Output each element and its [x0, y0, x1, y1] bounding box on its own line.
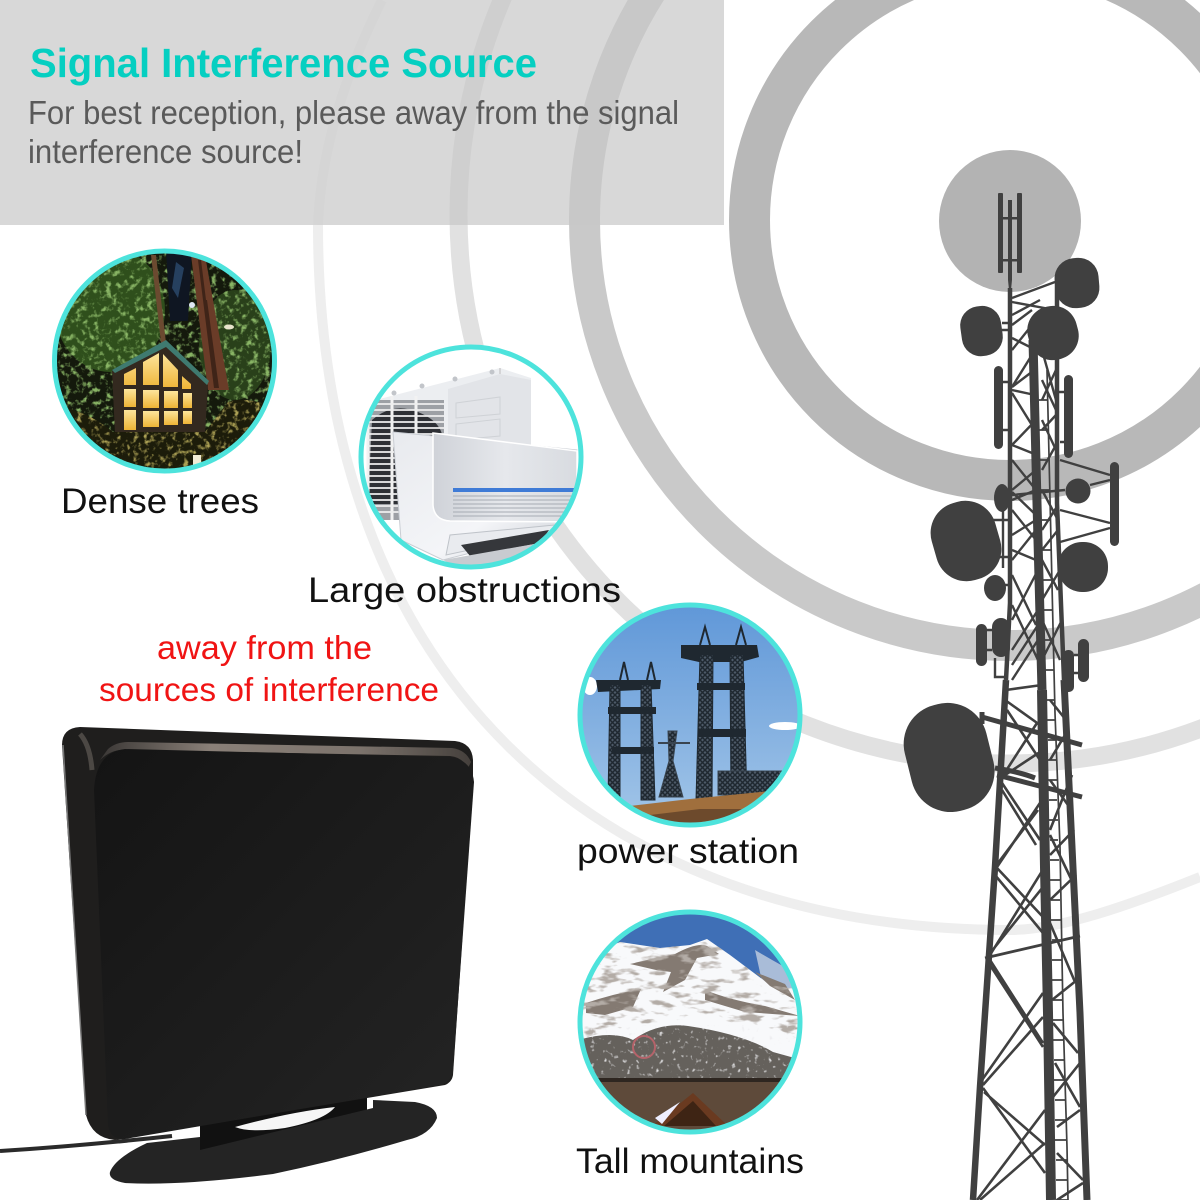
antenna product: [0, 727, 474, 1184]
corner highlight: [80, 734, 92, 770]
upper bracing: [1012, 282, 1062, 680]
cable: [0, 1136, 172, 1151]
photo: dense trees: [52, 248, 277, 474]
base stand: [200, 1085, 367, 1155]
small pylon: [659, 731, 683, 797]
teal frame: [580, 912, 800, 1132]
label: power station: power station: [577, 832, 799, 871]
subtitle: For best reception, please away from the signal: [28, 94, 679, 131]
signal rings: [318, 0, 1200, 930]
teal frame: [361, 347, 581, 567]
red callout: sources of interference: [99, 671, 439, 708]
distant structures: [718, 771, 786, 795]
photo: power station: [578, 603, 802, 827]
tower legs: [973, 277, 1087, 1200]
label: large obstructions: Large obstructions: [308, 571, 621, 610]
ring 1: [750, 0, 1200, 480]
base foot: [110, 1100, 437, 1184]
title: Signal Interference Source: [30, 40, 537, 86]
antenna panels: [976, 366, 1119, 692]
ladder: [1039, 370, 1068, 1200]
support arms: [982, 323, 1110, 797]
top antenna array: [998, 193, 1022, 290]
red callout: away from the: [157, 629, 372, 666]
left edge highlight: [63, 745, 86, 1115]
stand slot: [235, 1107, 335, 1130]
cell tower: [895, 193, 1119, 1200]
left pylon: [596, 680, 661, 692]
photo: tall mountains: [578, 910, 802, 1138]
top rim highlight: [100, 742, 471, 768]
antenna back shell: [62, 727, 473, 1140]
ring 3: [458, 0, 1200, 764]
ring 2: [584, 0, 1200, 646]
lower bracing: [977, 685, 1083, 1200]
center signal disc: [939, 150, 1081, 292]
header panel: [0, 0, 724, 225]
label: dense trees: Dense trees: [61, 482, 259, 521]
subtitle: interference source!: [28, 133, 303, 170]
antenna front face: [94, 749, 474, 1139]
photo: large obstructions: [359, 345, 583, 569]
right pylon: [681, 645, 759, 662]
ring 4, outermost faint: [318, 225, 1200, 930]
teal frame: [580, 605, 800, 825]
label: tall mountains: Tall mountains: [576, 1142, 804, 1181]
teal frame: [54, 251, 274, 471]
ring 4 upper section under panel: [318, 0, 382, 225]
dishes: [895, 256, 1108, 821]
